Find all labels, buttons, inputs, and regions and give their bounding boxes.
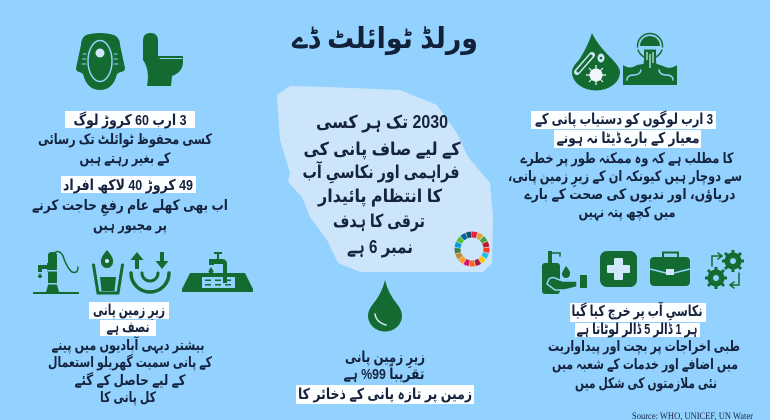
stat: open defecation: اب بھی کھلے عام رفعِ حاجت کرنے <box>32 198 228 216</box>
stat: open defecation: پر مجبور ہیں <box>93 218 167 234</box>
icon: gears and arrows <box>705 250 744 289</box>
stat: water quality data: 3 ارب لوگوں کو دستیاب پانی کے <box>535 110 713 129</box>
stat: groundwater share of fresh water: زمین پر تازہ پانی کے ذخائر کا <box>298 386 472 404</box>
icon: contaminated water drop <box>572 33 620 90</box>
icon: hand pump <box>33 252 79 294</box>
icon: western toilet <box>143 33 183 86</box>
stat: water quality data: دریاؤں، اور ندیوں کی صحت کے بارے <box>524 187 736 203</box>
stat: groundwater share of fresh water: تقریباً 99% ہے <box>344 363 424 383</box>
icon: water cycle arrows <box>130 252 169 292</box>
panel: SDG 6 blob: ترقی کا ہدف <box>333 211 425 232</box>
stat: open defecation: 49 کروڑ 40 لاکھ افراد <box>63 177 193 194</box>
stat: people without safe toilets: کے بغیر رہتے ہیں <box>80 151 171 167</box>
icon: medical cross <box>600 251 637 287</box>
panel: SDG 6 blob: فراہمی اور نکاسیِ آب <box>302 160 460 184</box>
stat: groundwater share of fresh water: زیرِ زمین پانی <box>345 349 425 369</box>
icon: squat toilet <box>76 33 125 90</box>
stat: water quality data: معیار کے بارے ڈیٹا نہ ہونے <box>556 130 700 147</box>
stat: groundwater half: نصف ہے <box>106 319 150 336</box>
panel: SDG 6 blob: نمبر 6 ہے <box>347 237 413 258</box>
icon: sink with tap <box>182 252 253 292</box>
icon: water glass <box>94 250 122 293</box>
stat: groundwater share of fresh water <box>296 349 474 404</box>
stat: people without safe toilets <box>38 111 212 167</box>
panel: SDG 6 blob: کا انتظام پائیدار <box>317 186 442 207</box>
stat: water quality data <box>508 110 742 222</box>
stat: people without safe toilets: کسی محفوظ ٹوائلٹ تک رسائی <box>38 132 212 148</box>
stat: sanitation returns: ہر 1 ڈالر 5 ڈالر لوٹاتا ہے <box>576 321 698 338</box>
stat: sanitation returns <box>548 302 740 392</box>
stat: groundwater half: زیرِ زمین پانی <box>93 302 165 322</box>
icon: hand wash bottle <box>542 251 587 294</box>
stat: people without safe toilets: 3 ارب 60 کروڑ لوگ <box>74 111 186 129</box>
stat: groundwater half: کے لیے حاصل کے گئے <box>74 371 186 389</box>
stat: water quality data: میں کچھ پتہ نہیں <box>578 205 676 222</box>
stat: open defecation <box>32 176 228 234</box>
icon: briefcase <box>650 252 690 286</box>
stat: sanitation returns: نکاسیِ آب پر خرچ کیا گیا <box>572 302 702 322</box>
panel: SDG 6 blob: کے لیے صاف پانی کی <box>304 139 461 160</box>
stat: groundwater half: کل پانی کا <box>100 390 156 406</box>
icon: SDG colour wheel <box>458 234 486 264</box>
stat: groundwater half: کے پانی سمیت گھریلو استعمال <box>48 353 212 371</box>
stat: groundwater half: بیشتر دیہی آبادیوں میں پینے <box>52 336 204 355</box>
icon: water drop <box>368 280 402 332</box>
title: ورلڈ ٹوائلٹ ڈے <box>291 23 478 55</box>
icon: sewage outfall <box>623 34 677 85</box>
panel: SDG 6 blob <box>277 86 493 272</box>
stat: groundwater half <box>48 302 212 406</box>
stat: sanitation returns: نئی ملازمتوں کی شکل میں <box>575 376 717 392</box>
panel: SDG 6 blob: 2030 تک ہر کسی <box>316 112 448 133</box>
